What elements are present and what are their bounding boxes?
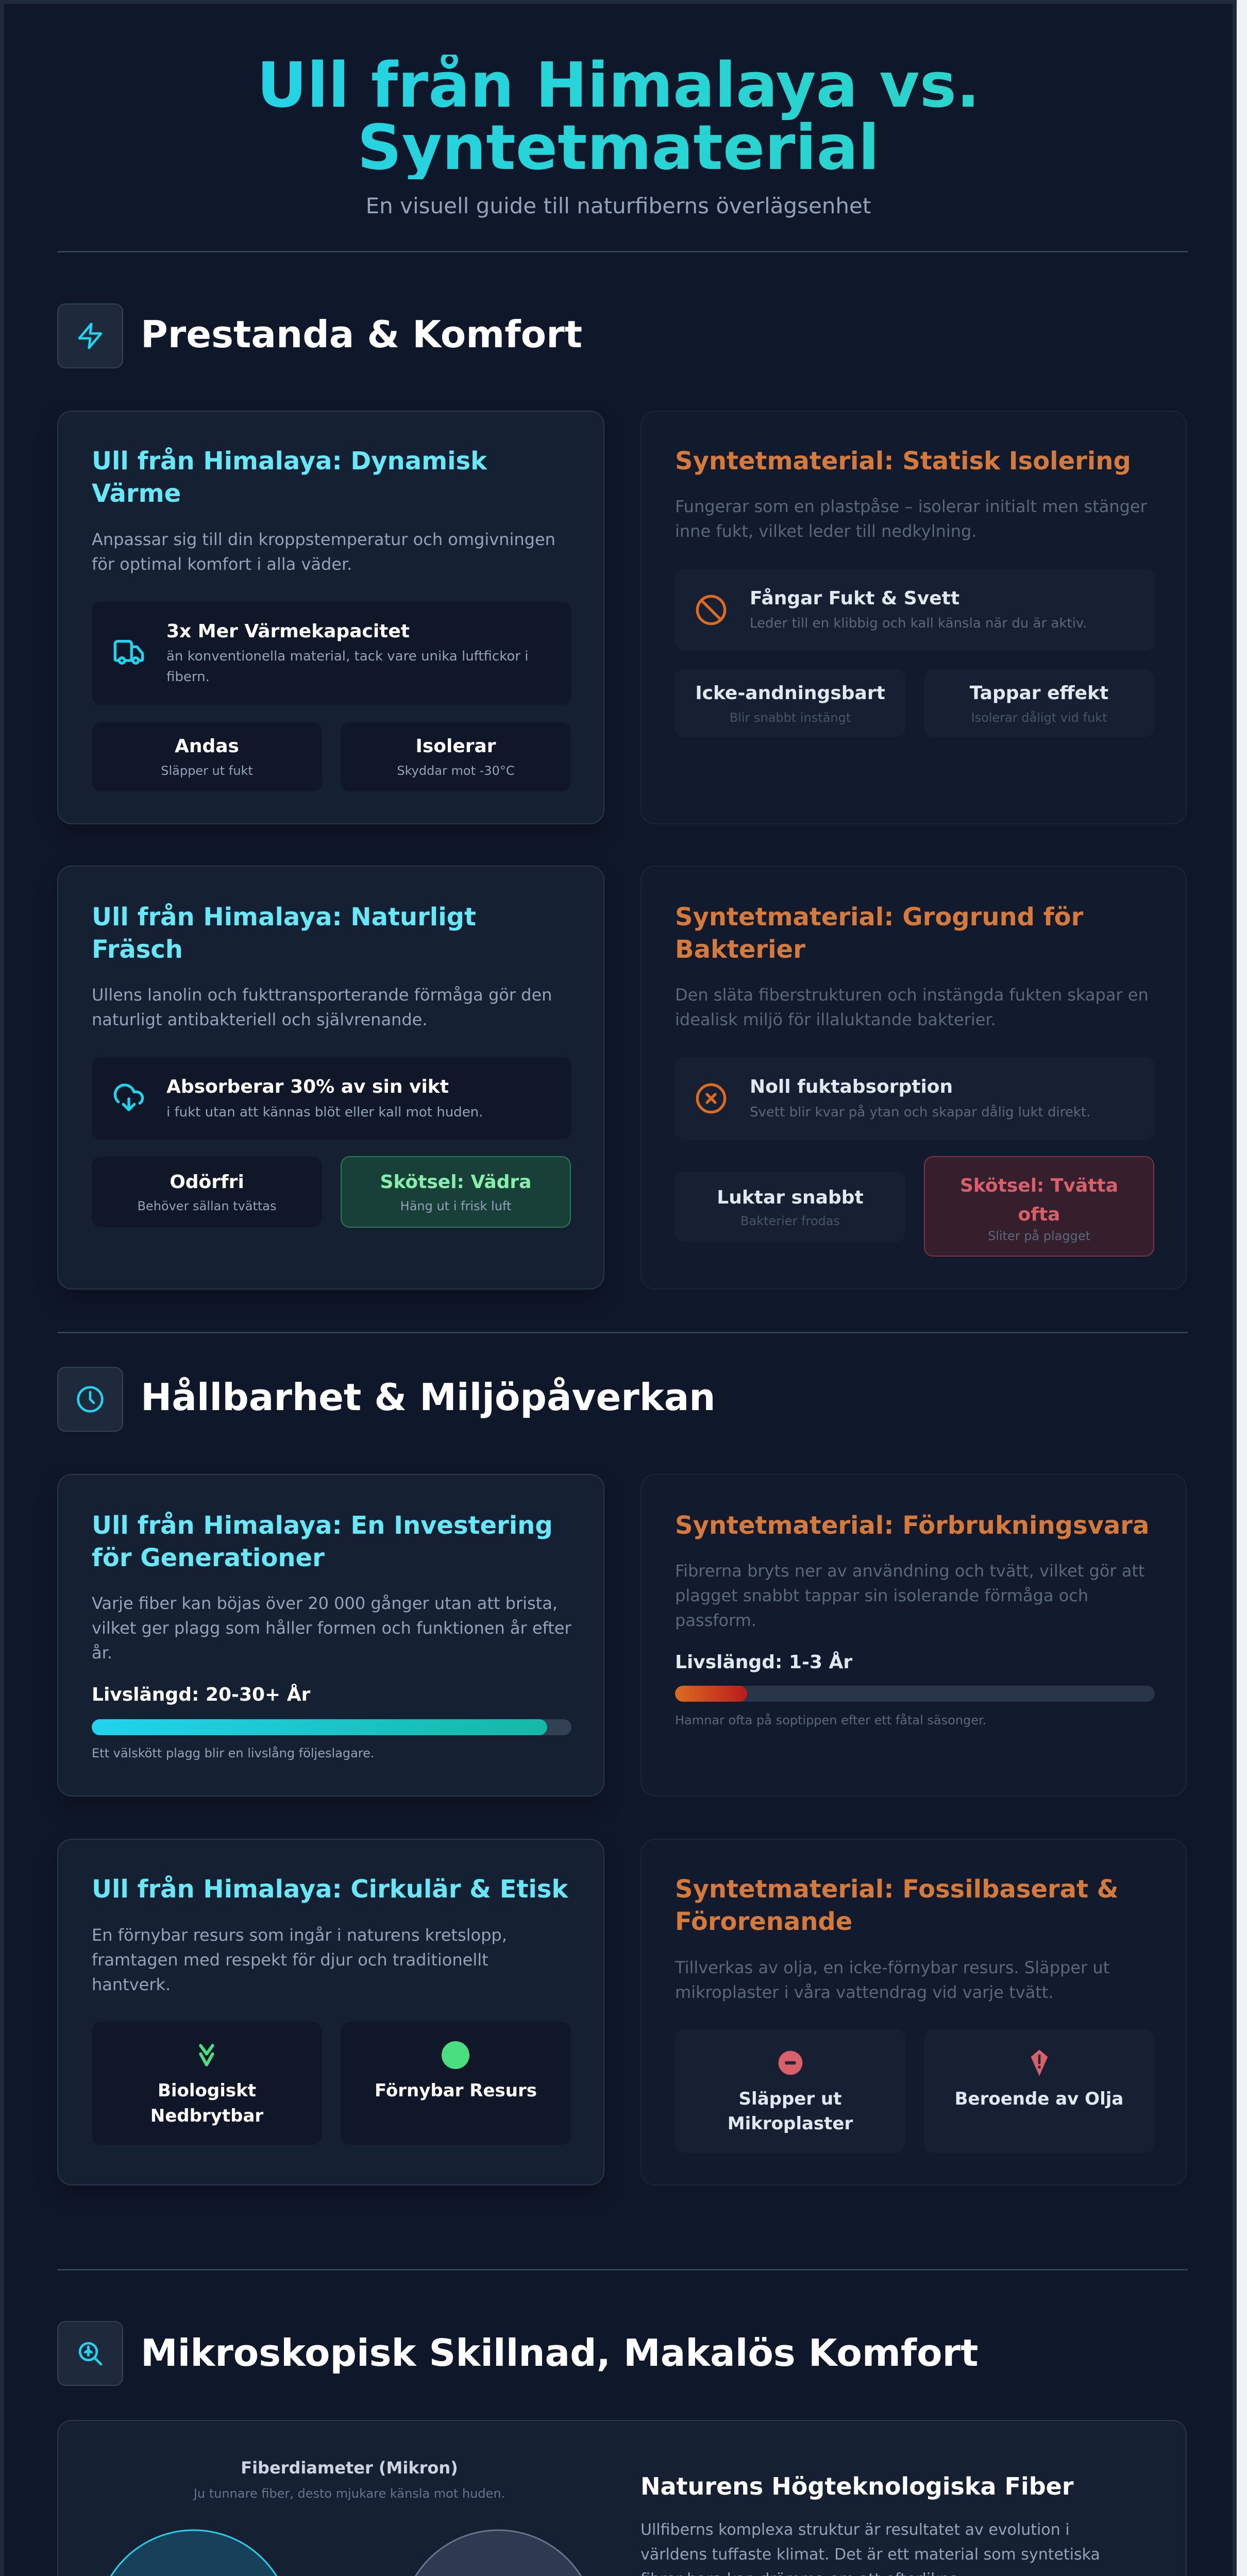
section heading: Prestanda & Komfort: Prestanda & Komfort [141,313,582,356]
stat: Tappar effekt: Tappar effekt [970,683,1108,704]
stat: Icke-andningsbart: Blir snabbt instängt [730,710,851,725]
stat: Icke-andningsbart [675,669,905,737]
stat: Luktar snabbt: Luktar snabbt [717,1187,864,1208]
icon: minus circle [778,2050,803,2075]
feature: zero absorption [675,1057,1155,1140]
bar chart: wool lifespan [92,1719,571,1735]
chart: fiber diameter circles [110,2530,582,2576]
card description: Varje fiber kan böjas över 20 000 gånger utan att brista, vilket ger plagg som håller formen och funktionen år efter år. [92,1594,571,1663]
icon: chevrons down [199,2044,214,2066]
card title: Syntetmaterial: Statisk Isolering [675,447,1131,476]
stat: biodegradable: Biologiskt [158,2080,256,2101]
card description: Tillverkas av olja, en icke-förnybar resurs. Släpper ut mikroplaster i våra vattendrag vid varje tvätt. [675,1958,1109,2002]
stat: microplastics [675,2029,905,2153]
stat: Odörfri [92,1157,322,1227]
title: Ull från Himalaya vs. [257,50,980,122]
card description: En förnybar resurs som ingår i naturens kretslopp, framtagen med respekt för djur och traditionellt hantverk. [92,1925,507,1994]
stat: Skötsel Vädra [341,1156,571,1228]
feature text: än konventionella material, tack vare unika luftfickor i fibern. [166,649,528,685]
stat: Isolerar [341,722,571,791]
icon: truck [113,640,144,665]
section icon: magnifier [57,2321,123,2386]
section icon: zap [57,303,123,368]
card title: Syntetmaterial: Grogrund för Bakterier [675,903,1083,964]
feature text: i fukt utan att kännas blöt eller kall mot huden. [166,1105,483,1120]
stat: Luktar snabbt [675,1172,905,1242]
icon: warning pin [1031,2049,1048,2076]
caption: Ett välskött plagg blir en livslång följeslagare. [92,1746,375,1760]
stat: Luktar snabbt: Bakterier frodas [740,1214,840,1228]
section heading: Hållbarhet: Hållbarhet & Miljöpåverkan [141,1376,716,1419]
stat: Skötsel Vädra: Häng ut i frisk luft [400,1199,511,1213]
panel: wool dynamic warmth [57,411,604,824]
card title: Syntetmaterial: Förbrukningsvara [675,1511,1149,1540]
stat: microplastics: Släpper ut [739,2089,841,2109]
title [4,55,1233,179]
feature text: Svett blir kvar på ytan och skapar dålig lukt direkt. [750,1105,1090,1120]
stat: Isolerar: Skyddar mot -30°C [397,764,515,778]
card title: Ull från Himalaya: Dynamisk Värme [92,447,487,508]
stat: microplastics: Mikroplaster [728,2113,853,2134]
stat: biodegradable [92,2022,322,2145]
feature: 3x heat capacity [92,602,571,705]
feature: absorbs 30% [92,1057,571,1140]
feature title: Fångar Fukt & Svett [750,588,959,609]
stat: Tappar effekt [924,669,1154,737]
panel: synthetic consumable [641,1474,1187,1797]
stat: Odörfri: Odörfri [170,1172,244,1193]
chart subheading: Ju tunnare fiber, desto mjukare känsla mot huden. [194,2486,505,2501]
card description: Anpassar sig till din kroppstemperatur och omgivningen för optimal komfort i alla väder. [92,530,555,574]
section icon: clock [57,1367,123,1432]
card description: Fibrerna bryts ner av användning och tvätt, vilket gör att plagget snabbt tappar sin isolerande förmåga och passform. [675,1561,1144,1630]
stat: oil dependent [924,2029,1154,2153]
stat: renewable [341,2022,571,2145]
card description: Den släta fiberstrukturen och instängda fukten skapar en idealisk miljö för illaluktande bakterier. [675,985,1149,1029]
card title: Syntetmaterial: Fossilbaserat & Förorenande [675,1875,1119,1936]
card description: Fungerar som en plastpåse – isolerar initialt men stänger inne fukt, vilket leder till nedkylning. [675,497,1147,541]
card title: Ull från Himalaya: En Investering för Generationer [92,1511,553,1572]
feature text: Leder till en klibbig och kall känsla när du är aktiv. [750,616,1087,631]
panel: wool circular [57,1839,604,2185]
panel: fiber comparison [57,2420,1187,2576]
stat: Icke-andningsbart: Icke-andningsbart [695,683,885,704]
icon: x circle [696,1083,727,1114]
feature: traps moisture [675,569,1155,651]
stat: oil dependent: Beroende av Olja [955,2089,1123,2109]
stat: Andas [92,722,322,791]
title: Syntetmaterial [357,112,880,184]
circle: Himalaya wool [96,2530,291,2576]
lifespan label: Livslängd: 1-3 År [675,1652,852,1673]
feature title: 3x Mer Värmekapacitet [166,621,410,642]
stat: Skötsel Tvätta ofta: Sliter på plagget [988,1229,1090,1243]
card title: Ull från Himalaya: Naturligt Fräsch [92,903,476,964]
card title: Ull från Himalaya: Cirkulär & Etisk [92,1875,568,1904]
stat: Odörfri: Behöver sällan tvättas [137,1199,277,1213]
stat: Skötsel Tvätta ofta: Skötsel: Tvätta ofta [960,1175,1118,1225]
caption: Hamnar ofta på soptippen efter ett fåtal säsonger. [675,1713,986,1727]
section heading: Mikroskopisk: Mikroskopisk Skillnad, Makalös Komfort [141,2331,979,2375]
stat: biodegradable: Nedbrytbar [150,2106,263,2126]
panel: wool naturally fresh [57,866,604,1290]
subtitle: En visuell guide till naturfiberns överlägsenhet [366,193,871,218]
stat: Skötsel Tvätta ofta [924,1156,1154,1257]
icon: ban [696,595,727,625]
chart heading: Fiberdiameter (Mikron) [241,2458,458,2478]
bar chart: synthetic lifespan [675,1686,1155,1702]
stat: Tappar effekt: Isolerar dåligt vid fukt [971,710,1107,725]
stat: Andas: Andas [175,736,239,757]
stat: renewable: Förnybar Resurs [375,2080,537,2101]
lifespan label: Livslängd: 20-30+ År [92,1684,310,1705]
icon: cloud download [113,1083,144,1111]
feature title: Noll fuktabsorption [750,1076,953,1097]
icon: green circle [442,2041,469,2069]
circle: ordinary wool [401,2530,596,2576]
heading: Naturens Högteknologiska Fiber: Naturens Högteknologiska Fiber [641,2472,1074,2500]
stat: Isolerar: Isolerar [415,736,496,757]
stat: Skötsel Vädra: Skötsel: Vädra [380,1172,531,1193]
panel: synthetic fossil [641,1839,1187,2185]
panel: wool investment [57,1474,604,1797]
feature title: Absorberar 30% av sin vikt [166,1076,449,1097]
panel: synthetic bacteria [641,866,1187,1290]
card description: Ullens lanolin och fukttransporterande förmåga gör den naturligt antibakteriell och självrenande. [92,985,552,1029]
panel: synthetic static insulation [641,411,1187,824]
stat: Andas: Släpper ut fukt [161,764,253,778]
